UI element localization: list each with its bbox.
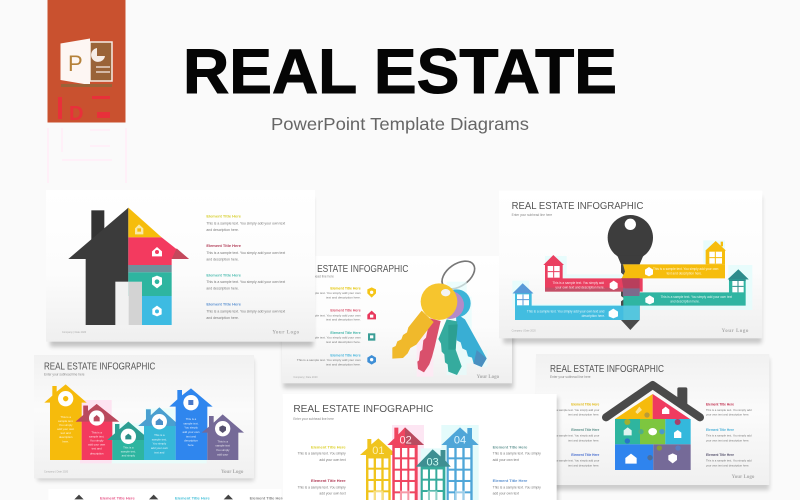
right list: Element Title Here	[706, 402, 734, 406]
yellow key	[392, 283, 457, 359]
yellow house: description	[59, 435, 73, 439]
sky house	[138, 407, 180, 460]
element list: Element Title Here	[206, 214, 242, 219]
panel: arrow houses slide: REAL ESTATE INFOGRAPHIC	[44, 361, 156, 372]
element list: This is a sample text. You simply add your own text	[206, 280, 285, 284]
element list: This is a sample text. You simply add your own text	[206, 309, 285, 313]
panel: puzzle house slide: Enter your subhead line here	[550, 375, 591, 379]
panel: big key slide: Your Logo	[722, 329, 749, 334]
right list	[706, 402, 752, 467]
blue house	[169, 388, 213, 460]
right list: your own text and description here.	[706, 438, 750, 442]
teal house: This is a	[123, 445, 134, 449]
colour halos	[512, 240, 752, 310]
left list: This is a sample text. You simply add your	[548, 408, 599, 412]
teal house	[107, 422, 150, 460]
title: REAL ESTATE	[183, 37, 617, 107]
panel: arrow houses slide: Your Logo	[221, 470, 244, 475]
panel: arrow houses slide: Enter your subhead line here	[44, 372, 85, 376]
panel: puzzle house slide: REAL ESTATE INFOGRAPHIC	[550, 364, 664, 375]
key element list: This is a sample text. You simply add your own	[297, 336, 361, 340]
right list: This is a sample text. You simply	[493, 485, 541, 489]
left list: text and description here.	[568, 463, 600, 467]
left list: Element Title Here	[311, 478, 346, 483]
key element list: Element Title Here	[330, 353, 361, 357]
element list: This is a sample text. You simply add your own text	[206, 251, 285, 255]
building 04	[441, 427, 479, 500]
teal arm	[623, 269, 749, 306]
panel: buildings slide: REAL ESTATE INFOGRAPHIC	[293, 404, 434, 415]
panel: buildings slide	[283, 394, 559, 500]
key ring	[437, 255, 480, 295]
building 03	[416, 449, 451, 500]
panel: house slide: Company | Date 2020	[62, 331, 87, 334]
element list: Element Title Here	[206, 243, 242, 248]
blue house: description	[184, 439, 198, 443]
right list: add your own text	[493, 492, 519, 496]
red house: sample text.	[89, 434, 105, 438]
panel: big key slide: Enter your subhead line here	[512, 213, 552, 217]
left list: This is a sample text. You simply	[298, 485, 346, 489]
left list	[548, 402, 600, 467]
right list: your own text and description here.	[706, 413, 750, 417]
sky house: sample text.	[152, 437, 167, 441]
subtitle: PowerPoint Template Diagrams	[271, 114, 529, 134]
panel: buildings slide: Enter your subhead line here	[293, 417, 334, 421]
element list: and description here.	[206, 287, 239, 291]
building 01: 01	[372, 445, 384, 457]
key element list: This is a sample text. You simply add your own	[297, 358, 361, 362]
panel: big key slide: REAL ESTATE INFOGRAPHIC	[512, 201, 644, 212]
red arm: your own text and description here.	[555, 285, 605, 289]
sky house: This is a	[154, 433, 165, 437]
left list: text and description here.	[568, 438, 600, 442]
panel: keys slide: Your Logo	[477, 375, 500, 380]
blue arm	[513, 283, 640, 320]
yellow house: text and	[61, 431, 71, 435]
building 01	[360, 438, 397, 500]
blue house: add your own	[183, 430, 200, 434]
right list	[493, 444, 541, 496]
left list: Element Title Here	[571, 428, 600, 432]
left list: add your own text	[319, 492, 346, 496]
left list: This is a sample text. You simply add your	[548, 459, 599, 463]
powerpoint badge	[48, 0, 126, 125]
element list: Element Title Here	[206, 301, 242, 306]
right list: Element Title Here	[706, 453, 734, 457]
blue house: sample text.	[183, 421, 199, 425]
door	[373, 491, 465, 500]
pale colour halo behind keys	[447, 282, 487, 375]
key element list: text and description here.	[326, 318, 361, 322]
yellow arm: This is a sample text. You simply add your own	[653, 267, 719, 271]
teal arm: This is a sample text. You simply add your own text	[661, 295, 732, 299]
red house	[76, 404, 119, 460]
yellow house	[44, 384, 87, 460]
key element list: Element Title Here	[330, 331, 361, 335]
purple house: sample text	[215, 444, 230, 448]
key element list: Element Title Here	[330, 286, 361, 290]
purple band	[623, 288, 640, 296]
colour halos	[112, 408, 207, 463]
red arm: This is a sample text. You simply add	[552, 281, 604, 285]
yellow house: here.	[62, 440, 69, 444]
building 04: 04	[454, 434, 466, 446]
colour halos	[392, 425, 424, 500]
powerpoint badge: D	[69, 103, 83, 125]
sky house: text and	[154, 450, 165, 454]
purple house: add your	[217, 452, 228, 456]
key element list: This is a sample text. You simply add your own	[297, 291, 361, 295]
sky house: add your own	[151, 446, 168, 450]
yellow arm	[622, 241, 726, 278]
panel: puzzle house slide: Your Logo	[732, 475, 755, 480]
right list: This is a sample text. You simply	[493, 452, 541, 456]
red house: description	[90, 452, 104, 456]
key element list: text and description here.	[326, 340, 361, 344]
house illustration	[68, 208, 189, 325]
panel: keys slide: REAL ESTATE INFOGRAPHIC	[293, 264, 409, 275]
blue key	[443, 289, 487, 367]
partial house icons	[74, 495, 233, 499]
teal house: sample text.	[121, 450, 136, 454]
element list: This is a sample text. You simply add your own text	[206, 222, 285, 226]
red house: You simply	[90, 438, 104, 442]
puzzle house	[606, 385, 700, 470]
panel: keys slide: Company | Date 2020	[293, 376, 318, 379]
yellow house: add your own	[57, 427, 75, 431]
key element list: Element Title Here	[330, 309, 361, 313]
teal house: and simply	[122, 454, 136, 458]
key element list: text and description here.	[326, 362, 361, 366]
right list: Element Title Here	[493, 478, 528, 483]
right list: add your own text	[493, 458, 519, 462]
yellow house: This is a	[60, 415, 71, 419]
blue house: You simply	[184, 426, 198, 430]
panel: big key slide	[499, 191, 762, 343]
left list	[298, 444, 346, 496]
right list: Element Title Here	[706, 428, 734, 432]
left list: add your own text	[319, 458, 346, 462]
element list: and description here.	[206, 257, 239, 261]
element list: and description here.	[206, 316, 239, 320]
building 03: 03	[427, 457, 439, 469]
panel: keys slide: Enter your subhead line here	[293, 274, 334, 278]
right list: This is a sample text. You simply add	[706, 408, 752, 412]
teal key	[436, 291, 464, 375]
big key	[608, 215, 653, 330]
yellow arm: text and description here.	[667, 272, 702, 276]
red house: text and	[92, 446, 102, 450]
red house: This is a	[91, 430, 102, 434]
purple house	[202, 414, 244, 460]
panel: arrow houses slide: Company | Date 2020	[44, 471, 69, 474]
panel: house slide: Your Logo	[272, 331, 299, 336]
right list: This is a sample text. You simply add	[706, 434, 752, 438]
building 02: 02	[400, 434, 412, 446]
blue house: here.	[188, 443, 194, 447]
panel: puzzle house slide	[536, 354, 769, 490]
red house: add your own	[88, 442, 106, 446]
building 02	[387, 427, 424, 500]
blue house: This is a	[186, 417, 197, 421]
purple house: You simply	[216, 448, 230, 452]
pale ghost reflection of badge	[48, 128, 126, 183]
left list: Element Title Here	[571, 402, 600, 406]
key icons	[367, 287, 376, 365]
red arm	[543, 255, 643, 292]
panel: keys slide	[282, 255, 513, 388]
right list: This is a sample text. You simply add	[706, 459, 752, 463]
element list	[206, 214, 285, 320]
right list: Element Title Here	[493, 444, 528, 449]
left list: This is a sample text. You simply add your	[548, 434, 599, 438]
blue arm: This is a sample text. You simply add your own text and	[527, 309, 605, 313]
yellow house: You simply	[59, 423, 73, 427]
key element list: text and description here.	[326, 295, 361, 299]
panel: arrow houses slide	[34, 355, 254, 481]
key element list: This is a sample text. You simply add your own	[297, 313, 361, 317]
teal arm: and description here.	[670, 300, 700, 304]
panel: big key slide: Company | Date 2020	[512, 329, 536, 332]
element list: Element Title Here	[206, 272, 242, 277]
element list: and description here.	[206, 228, 239, 232]
panel: bottom partial slide	[48, 489, 285, 500]
sky house: You simply	[153, 442, 167, 446]
left list: Element Title Here	[571, 453, 600, 457]
red key	[417, 318, 441, 372]
right list: your own text and description here.	[706, 463, 750, 467]
blue house: text and	[186, 434, 196, 438]
blue arm: description here.	[582, 314, 605, 318]
panel: house slide	[46, 190, 315, 347]
purple house: This is a	[217, 439, 228, 443]
left list: This is a sample text. You simply	[298, 452, 346, 456]
yellow house: sample text.	[58, 419, 74, 423]
left list: text and description here.	[568, 413, 600, 417]
left list: Element Title Here	[311, 444, 346, 449]
key element list	[297, 286, 361, 366]
powerpoint badge: P	[68, 51, 83, 76]
